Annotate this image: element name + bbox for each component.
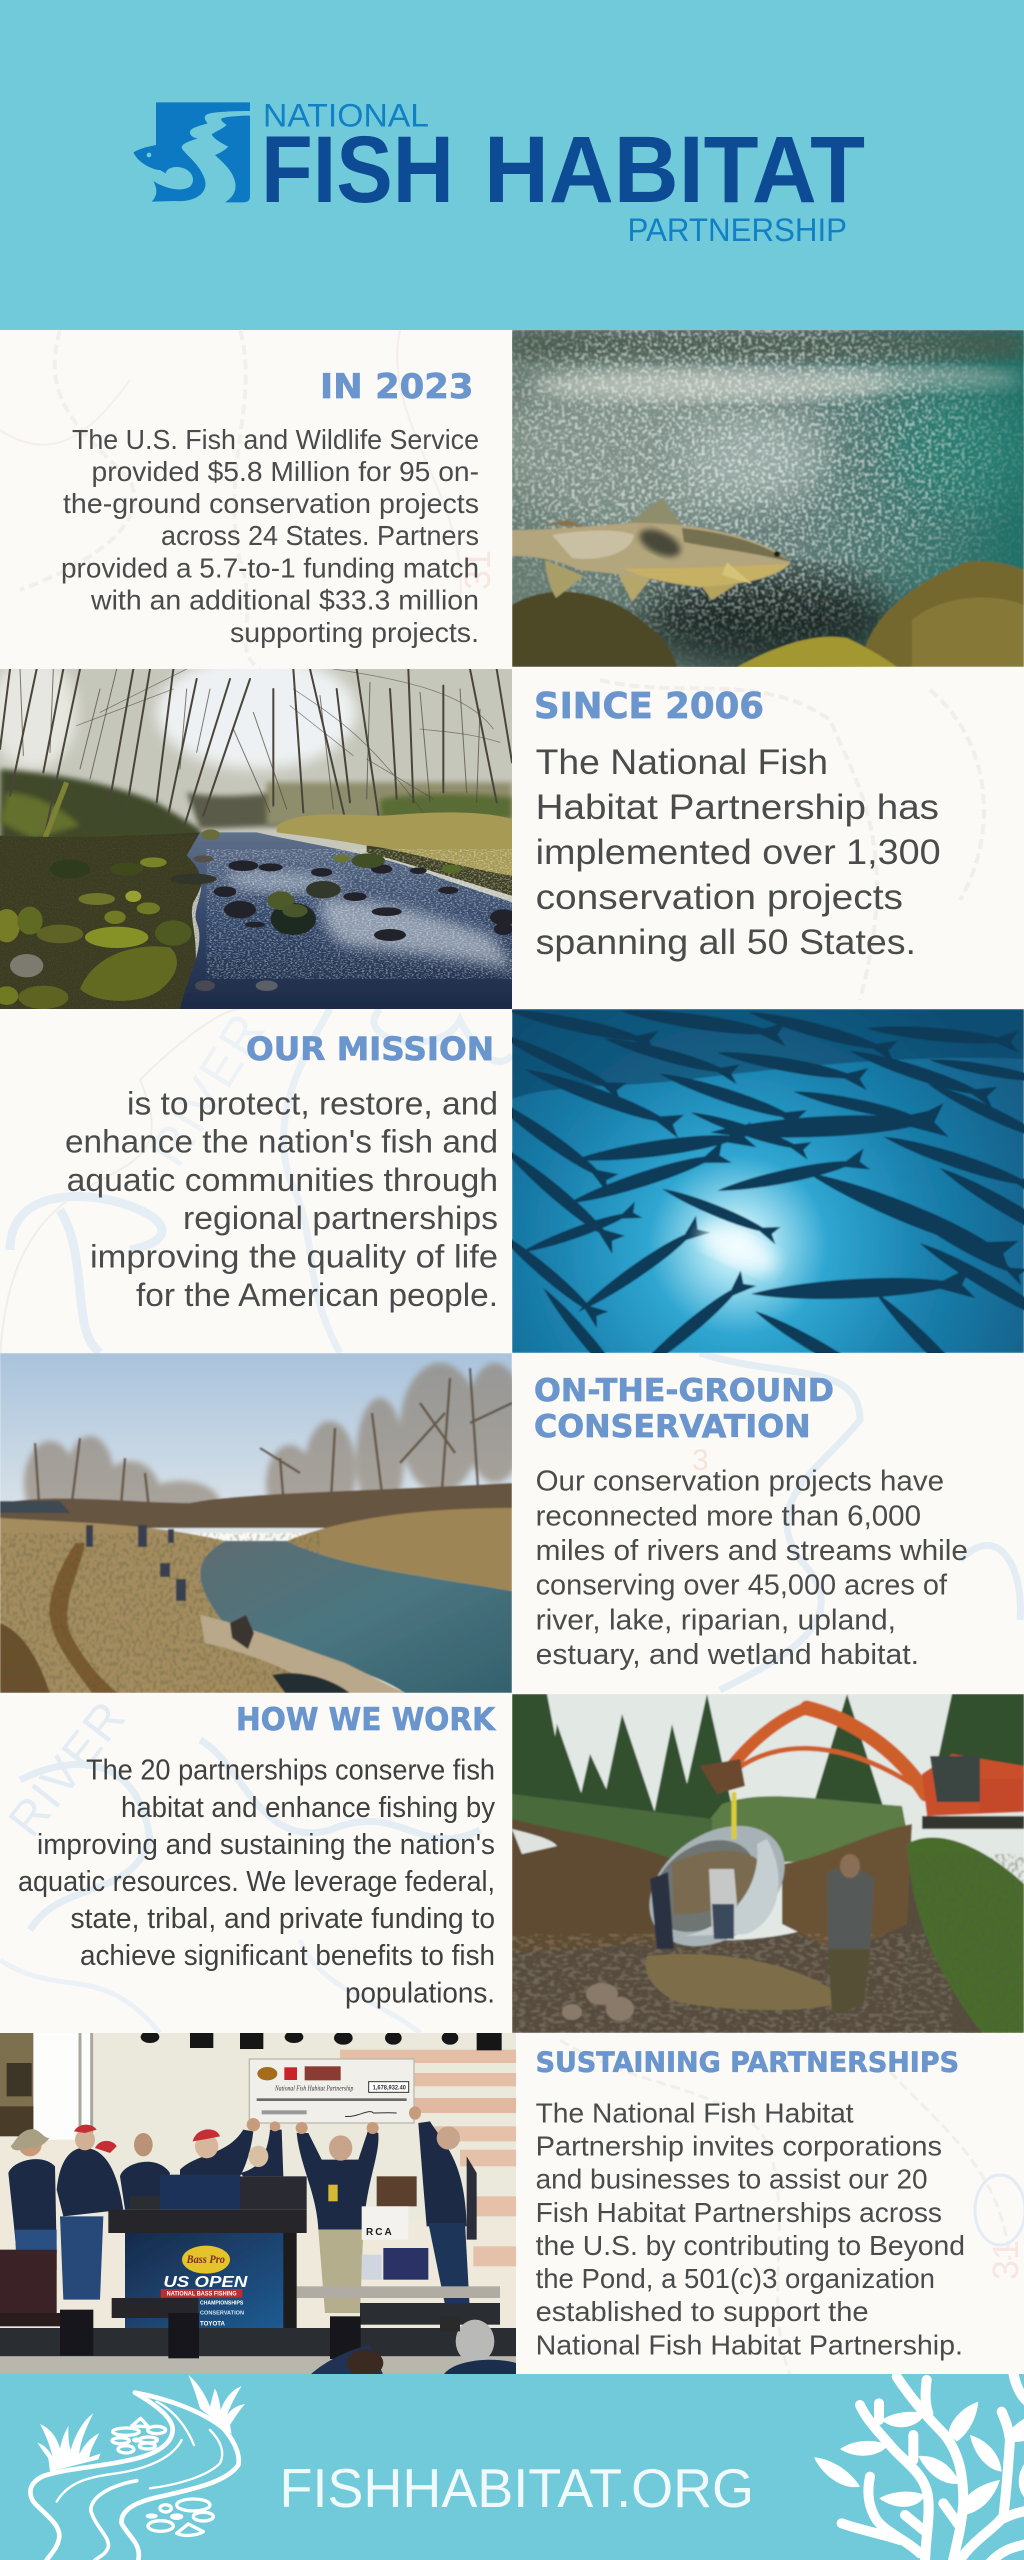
text block: the-ground conservation projects: [63, 488, 479, 519]
text block: miles of rivers and streams while: [536, 1535, 968, 1567]
faint map number: 31: [457, 550, 498, 590]
icon: coral branches: [814, 2374, 1024, 2560]
faint map label: river mission: RIVER: [139, 1002, 278, 1176]
faint map number lower: 3: [692, 1444, 709, 1477]
website address: FISHHABITAT.ORG: [280, 2457, 754, 2519]
text block: provided a 5.7-to-1 funding match: [61, 552, 479, 584]
text block: the Pond, a 501(c)3 organization: [536, 2263, 935, 2294]
text block: implemented over 1,300: [536, 833, 941, 872]
podium with banner: US OPEN: [163, 2274, 248, 2291]
people on stage: [8, 2106, 477, 2313]
panel: since 2006: [534, 686, 941, 962]
podium with banner: CONSERVATION: [200, 2311, 244, 2317]
panel: how we work: [18, 1702, 496, 2010]
text block: river, lake, riparian, upland,: [536, 1604, 896, 1636]
text block: provided $5.8 Million for 95 on-: [92, 456, 479, 487]
podium with banner: [108, 2175, 307, 2331]
logo: [133, 98, 865, 248]
text block: Our conservation projects have: [536, 1466, 944, 1498]
text block: spanning all 50 States.: [536, 923, 916, 962]
text block: conservation projects: [536, 878, 903, 917]
heading: SINCE 2006: [534, 686, 764, 727]
map background texture: [0, 330, 1024, 2374]
text block: [18, 1754, 495, 2010]
text block: [536, 2098, 965, 2360]
podium with banner: Bass Pro: [186, 2254, 225, 2266]
text block: state, tribal, and private funding to: [70, 1903, 495, 1935]
text block: across 24 States. Partners: [161, 520, 479, 551]
text block: Fish Habitat Partnerships across: [536, 2197, 942, 2228]
logo word: habitat: HABITAT: [484, 117, 865, 223]
heading: SUSTAINING PARTNERSHIPS: [536, 2046, 959, 2078]
text block: estuary, and wetland habitat.: [536, 1639, 919, 1671]
text block: reconnected more than 6,000: [536, 1500, 921, 1532]
photo: culvert installation: [512, 1694, 1024, 2033]
podium with banner: CHAMPIONSHIPS: [200, 2301, 244, 2307]
text block: [536, 743, 941, 962]
panel: sustaining partnerships: [536, 2046, 965, 2360]
background trophies and props: RCA: [366, 2227, 394, 2238]
text block: established to support the: [536, 2296, 869, 2327]
text block: improving the quality of life: [90, 1238, 498, 1274]
logo word: fish: FISH: [261, 117, 454, 223]
text block: aquatic resources. We leverage federal,: [18, 1866, 495, 1898]
text block: with an additional $33.3 million: [90, 584, 479, 616]
oversized check: 1,678,932.40: [373, 2085, 406, 2092]
panel: in 2023: [61, 367, 479, 648]
header band: [0, 0, 1024, 330]
heading: ON-THE-GROUND: [534, 1373, 834, 1409]
text block: [61, 424, 479, 648]
text block: populations.: [345, 1978, 495, 2010]
podium with banner: TOYOTA: [200, 2322, 226, 2328]
text block: regional partnerships: [183, 1200, 498, 1236]
background trophies and props: [0, 2176, 500, 2326]
heading: IN 2023: [320, 367, 474, 407]
text block: and businesses to assist our 20: [536, 2164, 928, 2194]
logo word: national: NATIONAL: [263, 98, 429, 134]
text block: The National Fish Habitat: [536, 2098, 854, 2128]
text block: aquatic communities through: [67, 1162, 498, 1198]
text block: achieve significant benefits to fish: [80, 1940, 495, 1972]
oversized check: National Fish Habitat Partnership: [274, 2083, 354, 2092]
text block: is to protect, restore, and: [127, 1086, 498, 1122]
text block: National Fish Habitat Partnership.: [536, 2330, 963, 2360]
text block: enhance the nation's fish and: [65, 1124, 498, 1160]
text block: The 20 partnerships conserve fish: [86, 1754, 495, 1786]
text block: Habitat Partnership has: [536, 788, 939, 827]
heading: OUR MISSION: [246, 1030, 494, 1068]
text block: habitat and enhance fishing by: [121, 1792, 495, 1824]
panel: on-the-ground conservation: [534, 1373, 968, 1671]
text block: improving and sustaining the nation's: [37, 1829, 495, 1861]
photo: forest stream: [0, 669, 512, 1009]
photo: trout among bubbles: [512, 330, 1024, 667]
icon: fish and river mark: [133, 102, 250, 202]
icon: river with grass and stones: [30, 2375, 245, 2560]
stage floor and speakers: [0, 2298, 516, 2376]
text block: The National Fish: [536, 743, 828, 782]
text block: [65, 1086, 498, 1313]
text block: the U.S. by contributing to Beyond: [536, 2230, 965, 2261]
heading: HOW WE WORK: [236, 1702, 496, 1738]
photo: anglers along a river: [0, 1353, 512, 1693]
heading: [534, 1373, 834, 1445]
oversized check: [249, 2059, 414, 2123]
logo word: partnership: PARTNERSHIP: [628, 212, 847, 248]
text block: conserving over 45,000 acres of: [536, 1570, 947, 1602]
photo: school of fish: [512, 1009, 1024, 1353]
photo: check presentation on stage: [0, 2033, 516, 2374]
heading: CONSERVATION: [534, 1409, 811, 1445]
footer band: [0, 2373, 1024, 2560]
text block: [536, 1466, 968, 1671]
panel: our mission: [65, 1030, 498, 1313]
text block: supporting projects.: [230, 617, 479, 648]
text block: The U.S. Fish and Wildlife Service: [72, 424, 479, 455]
podium with banner: NATIONAL BASS FISHING: [167, 2291, 237, 2298]
faint map label: river how we work: RIVER: [0, 1691, 137, 1847]
text block: for the American people.: [136, 1277, 498, 1313]
text block: Partnership invites corporations: [536, 2130, 942, 2162]
